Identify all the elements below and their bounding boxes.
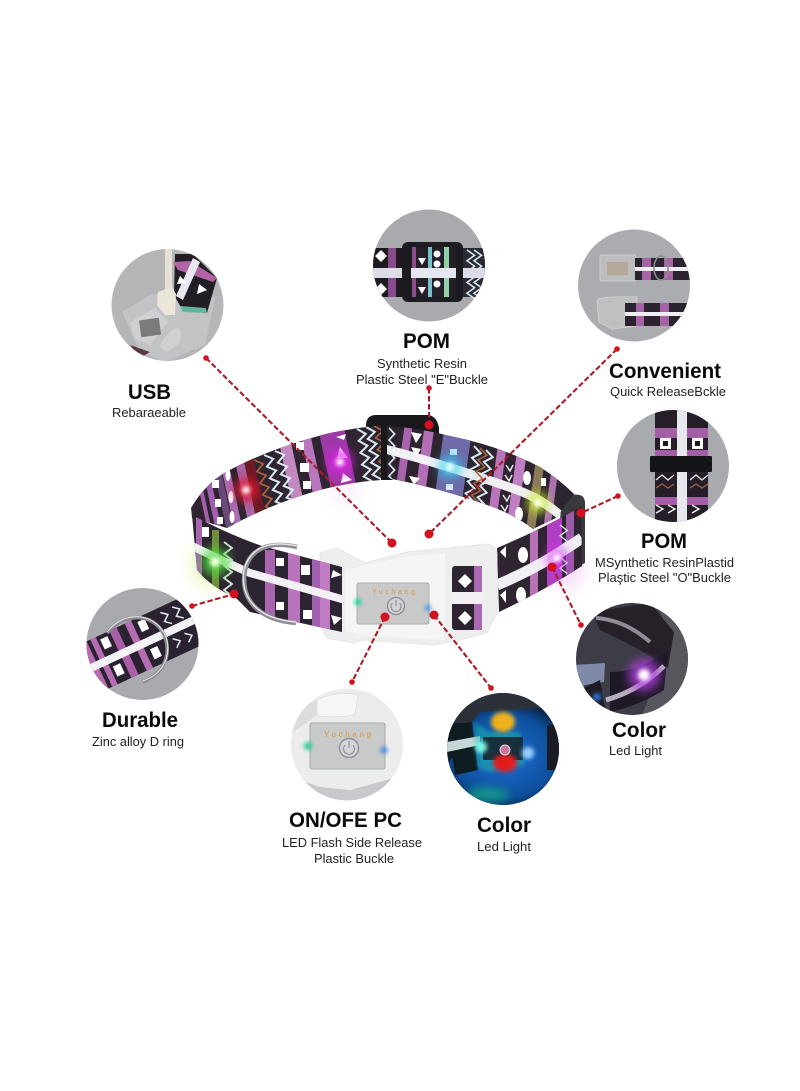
panel: Color right bbox=[574, 600, 690, 758]
clear plastic buckle bbox=[320, 544, 497, 645]
panel: ON/OFF button bbox=[282, 687, 422, 866]
text: Zinc alloy D ring bbox=[92, 734, 184, 749]
text bbox=[282, 835, 422, 866]
back left band bbox=[191, 425, 381, 528]
right side black slider bbox=[560, 494, 585, 571]
icon: multicolor light photo bbox=[445, 691, 565, 807]
panel: Durable bbox=[86, 588, 198, 748]
heading: Color bbox=[612, 719, 666, 742]
panel: POM O buckle bbox=[595, 408, 734, 585]
icon: purple light photo bbox=[574, 600, 690, 720]
text: Quick ReleaseBckle bbox=[610, 384, 726, 399]
dashed leader lines bbox=[192, 349, 618, 688]
LED lights bbox=[201, 449, 568, 576]
icon: power button photo bbox=[289, 687, 405, 805]
text: Plaştic Steel "O"Buckle bbox=[598, 570, 731, 585]
icon: power button photo: Yuchang bbox=[324, 730, 371, 739]
front right band bbox=[497, 507, 582, 612]
heading: USB bbox=[128, 381, 171, 404]
icon: O buckle photo bbox=[615, 408, 731, 524]
heading: ON/OFE PC bbox=[289, 809, 402, 832]
heading: POM bbox=[641, 530, 687, 553]
text: Rebaraeable bbox=[112, 405, 186, 420]
heading: Convenient bbox=[609, 360, 721, 383]
text: MSynthetic ResinPlastid bbox=[595, 555, 734, 570]
panel: POM E buckle bbox=[356, 206, 490, 387]
text: Plastic Steel "E"Buckle bbox=[356, 372, 488, 387]
heading: POM bbox=[403, 330, 450, 353]
control plate bbox=[354, 583, 431, 624]
right strap inside buckle bbox=[452, 566, 482, 630]
text: Led Light bbox=[477, 839, 531, 854]
collar bbox=[182, 410, 585, 645]
text bbox=[356, 356, 488, 387]
top black buckle bbox=[366, 415, 439, 480]
icon: USB charging port photo bbox=[110, 248, 225, 363]
panel: Color bottom bbox=[445, 691, 565, 854]
front left band bbox=[192, 517, 342, 632]
heading: Color bbox=[477, 814, 531, 837]
icon: E buckle photo bbox=[373, 210, 485, 322]
text bbox=[595, 555, 734, 585]
text: Plastic Buckle bbox=[314, 851, 394, 866]
icon: quick release photo bbox=[578, 230, 690, 342]
leader dots bbox=[189, 346, 621, 691]
collar light glow bbox=[191, 478, 583, 588]
control plate: Yuchang bbox=[372, 589, 415, 596]
icon: D ring photo bbox=[86, 588, 198, 700]
panel: USB bbox=[110, 248, 225, 420]
heading: Durable bbox=[102, 709, 178, 732]
text: Synthetic Resin bbox=[377, 356, 467, 371]
text: LED Flash Side Release bbox=[282, 835, 422, 850]
text: Led Light bbox=[609, 743, 662, 758]
back right band bbox=[387, 426, 574, 529]
D ring bbox=[243, 544, 297, 623]
panel: Convenient bbox=[575, 228, 726, 399]
